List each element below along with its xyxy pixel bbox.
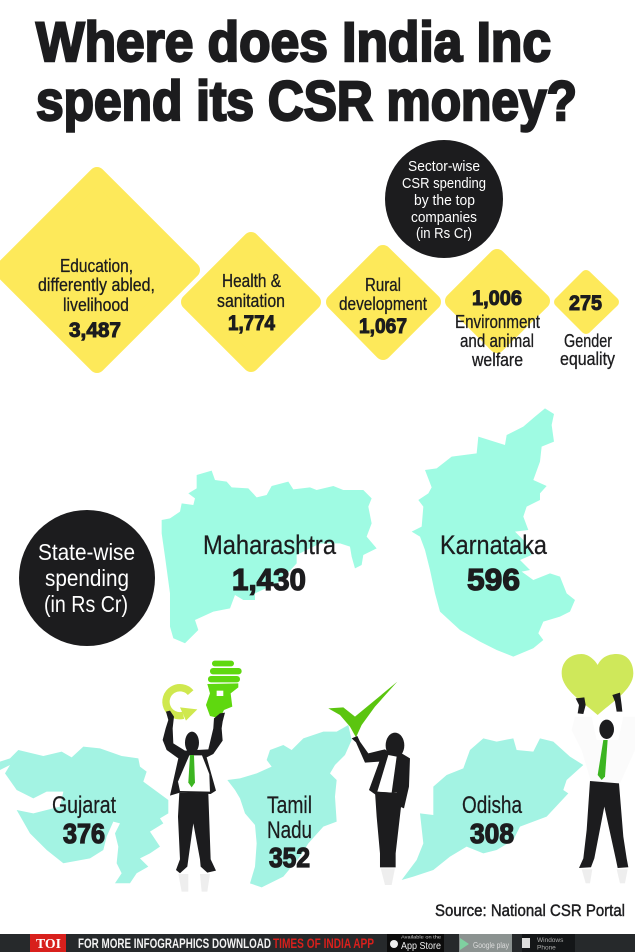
map: Tamil Nadu: Nadu (267, 817, 312, 844)
callout: state-wise heading circle: spending (45, 565, 129, 591)
sector: health and sanitation: 1,774 (228, 312, 275, 335)
badge: Windows Phone: Windows (537, 937, 564, 944)
badge: Google play: Google play (473, 941, 509, 950)
sector: education: differently abled, (38, 275, 155, 295)
sector: education: 3,487 (69, 319, 121, 342)
figure: man holding recycling arrow and bulb (163, 661, 242, 892)
map: Odisha: Odisha (462, 792, 523, 819)
callout: sector-wise heading circle: companies (411, 209, 477, 226)
callout: sector-wise heading circle: Sector-wise (408, 158, 480, 175)
map: Odisha (402, 738, 583, 880)
callout: state-wise heading circle: (in Rs Cr) (44, 591, 128, 617)
logo: TOI (30, 934, 66, 952)
sector: gender equality (559, 275, 615, 369)
map: Karnataka: Karnataka (440, 530, 548, 560)
sector: education: livelihood (63, 295, 129, 315)
footer bar (0, 934, 635, 952)
figure: man holding heart (562, 654, 635, 883)
sector: rural development (334, 253, 433, 352)
sector: rural development: Rural (365, 275, 401, 295)
sector: rural development: 1,067 (359, 315, 407, 338)
badge: Windows Phone: Phone (537, 944, 556, 952)
man silhouette (163, 711, 225, 873)
badge: Google play (459, 934, 512, 952)
sector: education: Education, (60, 256, 133, 276)
sector: environment and animal welfare: welfare (471, 350, 523, 370)
title: Where does India Inc (36, 10, 551, 73)
hands (576, 693, 622, 714)
sector: gender equality: Gender (564, 331, 612, 351)
map: Karnataka: 596 (467, 562, 520, 597)
callout: sector-wise heading circle (385, 140, 503, 258)
reflection (582, 869, 628, 883)
callout: state-wise heading circle (19, 510, 155, 646)
map: Gujarat: 376 (63, 818, 105, 849)
callout: sector-wise heading circle: CSR spending (402, 175, 486, 192)
man silhouette (572, 717, 635, 868)
icon: energy saving bulb (206, 661, 242, 718)
footer message: TIMES OF INDIA APP (273, 935, 374, 951)
badge: App Store: App Store (401, 941, 441, 952)
callout: sector-wise heading circle: (in Rs Cr) (416, 225, 472, 242)
map: Tamil Nadu: Tamil (267, 792, 312, 819)
map: Tamil Nadu (227, 725, 352, 887)
sector: environment and animal welfare: and animal (460, 331, 534, 351)
footer message: FOR MORE INFOGRAPHICS DOWNLOAD (78, 935, 271, 951)
title (36, 10, 577, 132)
badge: App Store (387, 934, 444, 952)
sector: gender equality: equality (560, 349, 615, 369)
badge: App Store: Available on the (401, 934, 442, 940)
map: Tamil Nadu: 352 (269, 842, 310, 873)
sector: environment and animal welfare: 1,006 (472, 287, 522, 310)
panel: sector-wise spending (2, 140, 615, 370)
icon: heart (562, 654, 633, 715)
reflection (178, 874, 210, 892)
map: Karnataka (412, 408, 575, 657)
figure: woman holding check mark (328, 682, 410, 885)
icon: recycling arrow (166, 688, 197, 721)
sector: health and sanitation: Health & (222, 271, 281, 291)
sector: health and sanitation: sanitation (217, 291, 285, 311)
map: Maharashtra (162, 471, 377, 643)
map: Maharashtra: 1,430 (232, 562, 306, 597)
icon: check mark (328, 682, 397, 737)
sector: education (2, 175, 192, 365)
reflection (381, 868, 395, 885)
badge: Windows Phone (522, 934, 575, 952)
callout: sector-wise heading circle: by the top (414, 192, 475, 209)
map: Gujarat (0, 747, 168, 883)
woman silhouette (352, 733, 410, 867)
title: spend its CSR money? (36, 69, 577, 132)
map: Gujarat: Gujarat (52, 792, 116, 819)
sector: rural development: development (339, 294, 427, 314)
sector: health and sanitation (189, 240, 313, 364)
callout: state-wise heading circle: State-wise (38, 539, 135, 565)
map: Odisha: 308 (470, 818, 514, 849)
sector: gender equality: 275 (569, 292, 602, 315)
map: Maharashtra: Maharashtra (203, 530, 337, 560)
logo: TOI: TOI (36, 937, 61, 952)
sector: environment and animal welfare (453, 257, 542, 370)
sector: environment and animal welfare: Environment (455, 312, 540, 332)
